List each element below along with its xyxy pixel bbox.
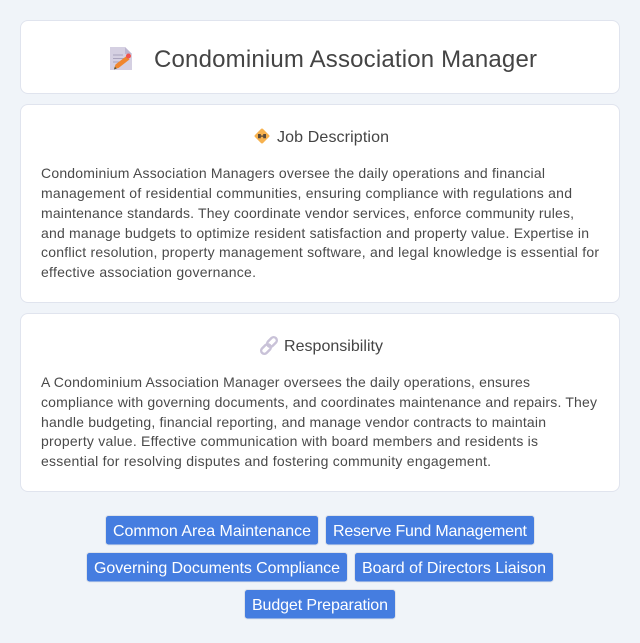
icon: job description diamond [254, 128, 270, 144]
text: job description body: effective association governance. [41, 264, 256, 280]
title: Condominium Association Manager [154, 46, 537, 73]
tag: governing documents compliance: Governing Documents Compliance [94, 560, 340, 577]
text: job description body: conflict resolution, property management software, and legal knowledge is essential for [41, 244, 599, 260]
tag: board of directors liaison [354, 552, 554, 582]
text: responsibility body: property value. Effective communication with board members and residents is [41, 433, 538, 449]
text: responsibility body: essential for resolving disputes and fostering community engagement. [41, 453, 491, 469]
panel: title card [20, 20, 620, 94]
text: job description body: management of residential communities, ensuring compliance with regulations and [41, 185, 572, 201]
tag: reserve fund management: Reserve Fund Management [333, 523, 528, 540]
text: job description body: Condominium Association Managers oversee the daily operations and financial [41, 165, 545, 181]
icon: document with pencil [110, 47, 132, 70]
text: responsibility body: handle budgeting, financial reporting, and manage vendor contracts to maintain [41, 414, 546, 430]
tag: governing documents compliance [86, 552, 348, 582]
tag: common area maintenance [106, 516, 318, 545]
heading: job description: Job Description [277, 129, 389, 146]
tag: common area maintenance: Common Area Maintenance [113, 523, 311, 540]
icon: chain link [260, 336, 278, 355]
text: job description body: maintenance standards. They coordinate vendor services, enforce community rules, [41, 205, 574, 221]
tag: budget preparation: Budget Preparation [252, 597, 388, 614]
tag: budget preparation [244, 590, 396, 619]
tag: reserve fund management [326, 516, 534, 545]
panel: job description card [20, 104, 620, 303]
text: responsibility body [41, 374, 597, 469]
heading: responsibility: Responsibility [284, 338, 383, 355]
tag: board of directors liaison: Board of Directors Liaison [362, 560, 546, 577]
text: job description body [41, 165, 599, 280]
text: responsibility body: compliance with governing documents, and coordinates maintenance and repairs. They [41, 394, 597, 410]
text: responsibility body: A Condominium Association Manager oversees the daily operations, ensures [41, 374, 530, 390]
panel: responsibility card [20, 313, 620, 492]
text: job description body: and manage budgets to optimize resident satisfaction and property value. Expertise in [41, 225, 589, 241]
